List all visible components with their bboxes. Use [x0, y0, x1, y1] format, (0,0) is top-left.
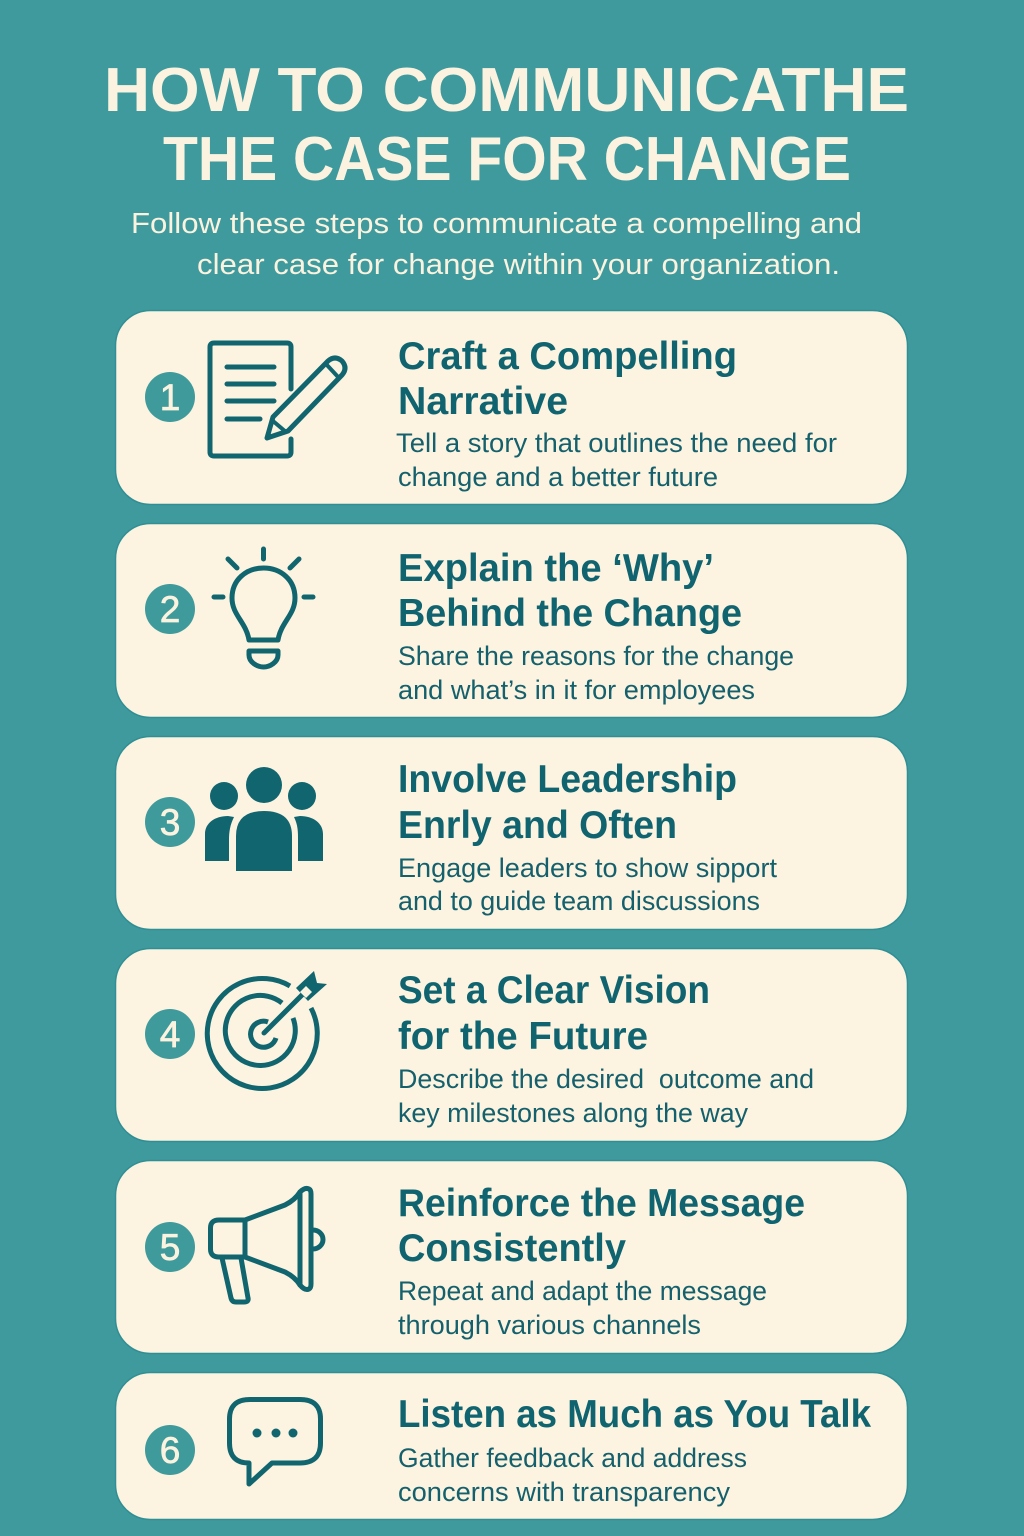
description: step 3: [398, 853, 777, 916]
panel: step 1: [116, 310, 908, 504]
badge: number 3: 3: [160, 802, 180, 843]
heading: step 2: Explain the ‘Why’: [398, 547, 714, 590]
description: step 5: through various channels: [398, 1310, 701, 1340]
description: step 5: Repeat and adapt the message: [398, 1276, 767, 1306]
description: step 2: [398, 641, 794, 705]
heading: step 5: [398, 1182, 805, 1270]
icon: light bulb: [214, 549, 313, 667]
icon: speech bubble: [230, 1400, 320, 1484]
badge: number 4: 4: [160, 1014, 180, 1055]
description: step 2: and what’s in it for employees: [398, 675, 755, 705]
description: step 1: change and a better future: [398, 462, 718, 492]
description: step 5: [398, 1276, 767, 1340]
heading: step 3: Enrly and Often: [398, 804, 677, 847]
heading: step 3: Involve Leadership: [398, 758, 737, 801]
description: step 6: Gather feedback and address: [398, 1443, 747, 1473]
icon: three people: [205, 767, 323, 871]
heading: step 1: Craft a Compelling: [398, 335, 737, 378]
description: step 3: and to guide team discussions: [398, 886, 760, 916]
description: step 1: Tell a story that outlines the need for: [396, 428, 837, 458]
heading: step 4: for the Future: [398, 1015, 648, 1058]
badge: number 5: [145, 1222, 195, 1272]
description: step 3: Engage leaders to show sipport: [398, 853, 777, 883]
heading: step 1: Narrative: [398, 380, 568, 423]
icon: document and pencil: [210, 343, 345, 456]
heading: step 1: [398, 335, 737, 423]
badge: number 4: [145, 1009, 195, 1059]
description: step 2: Share the reasons for the change: [398, 641, 794, 671]
panel: step 4: [116, 948, 908, 1142]
badge: number 2: [145, 584, 195, 634]
badge: number 5: 5: [160, 1227, 180, 1268]
description: step 6: [398, 1443, 747, 1507]
badge: number 6: 6: [160, 1430, 180, 1471]
subtitle: clear case for change within your organization.: [197, 249, 840, 281]
icon: target with arrow: [207, 971, 327, 1088]
panel: step 5: [116, 1160, 908, 1354]
title: HOW TO COMMUNICATHE: [104, 56, 909, 125]
icon: megaphone: [210, 1188, 323, 1302]
description: step 4: [398, 1064, 814, 1128]
heading: step 5: Consistently: [398, 1227, 626, 1270]
panel: step 2: [116, 524, 908, 718]
description: step 4: key milestones along the way: [398, 1098, 748, 1128]
badge: number 6: [145, 1425, 195, 1475]
panel: step 6: [116, 1372, 908, 1520]
subtitle: [131, 208, 862, 281]
heading: step 5: Reinforce the Message: [398, 1182, 805, 1225]
badge: number 2: 2: [160, 589, 180, 630]
badge: number 1: 1: [160, 377, 180, 418]
heading: step 3: [398, 758, 737, 847]
description: step 4: Describe the desired outcome and: [398, 1064, 814, 1094]
badge: number 1: [145, 372, 195, 422]
title: THE CASE FOR CHANGE: [163, 125, 851, 194]
badge: number 3: [145, 797, 195, 847]
heading: step 6: Listen as Much as You Talk: [398, 1393, 871, 1436]
description: step 6: concerns with transparency: [398, 1477, 731, 1507]
description: step 1: [396, 428, 837, 492]
heading: step 2: [398, 547, 742, 635]
heading: step 4: [398, 969, 710, 1058]
title: [104, 56, 909, 194]
heading: step 4: Set a Clear Vision: [398, 969, 710, 1012]
subtitle: Follow these steps to communicate a compelling and: [131, 208, 862, 240]
heading: step 2: Behind the Change: [398, 592, 742, 635]
panel: step 3: [116, 736, 908, 930]
